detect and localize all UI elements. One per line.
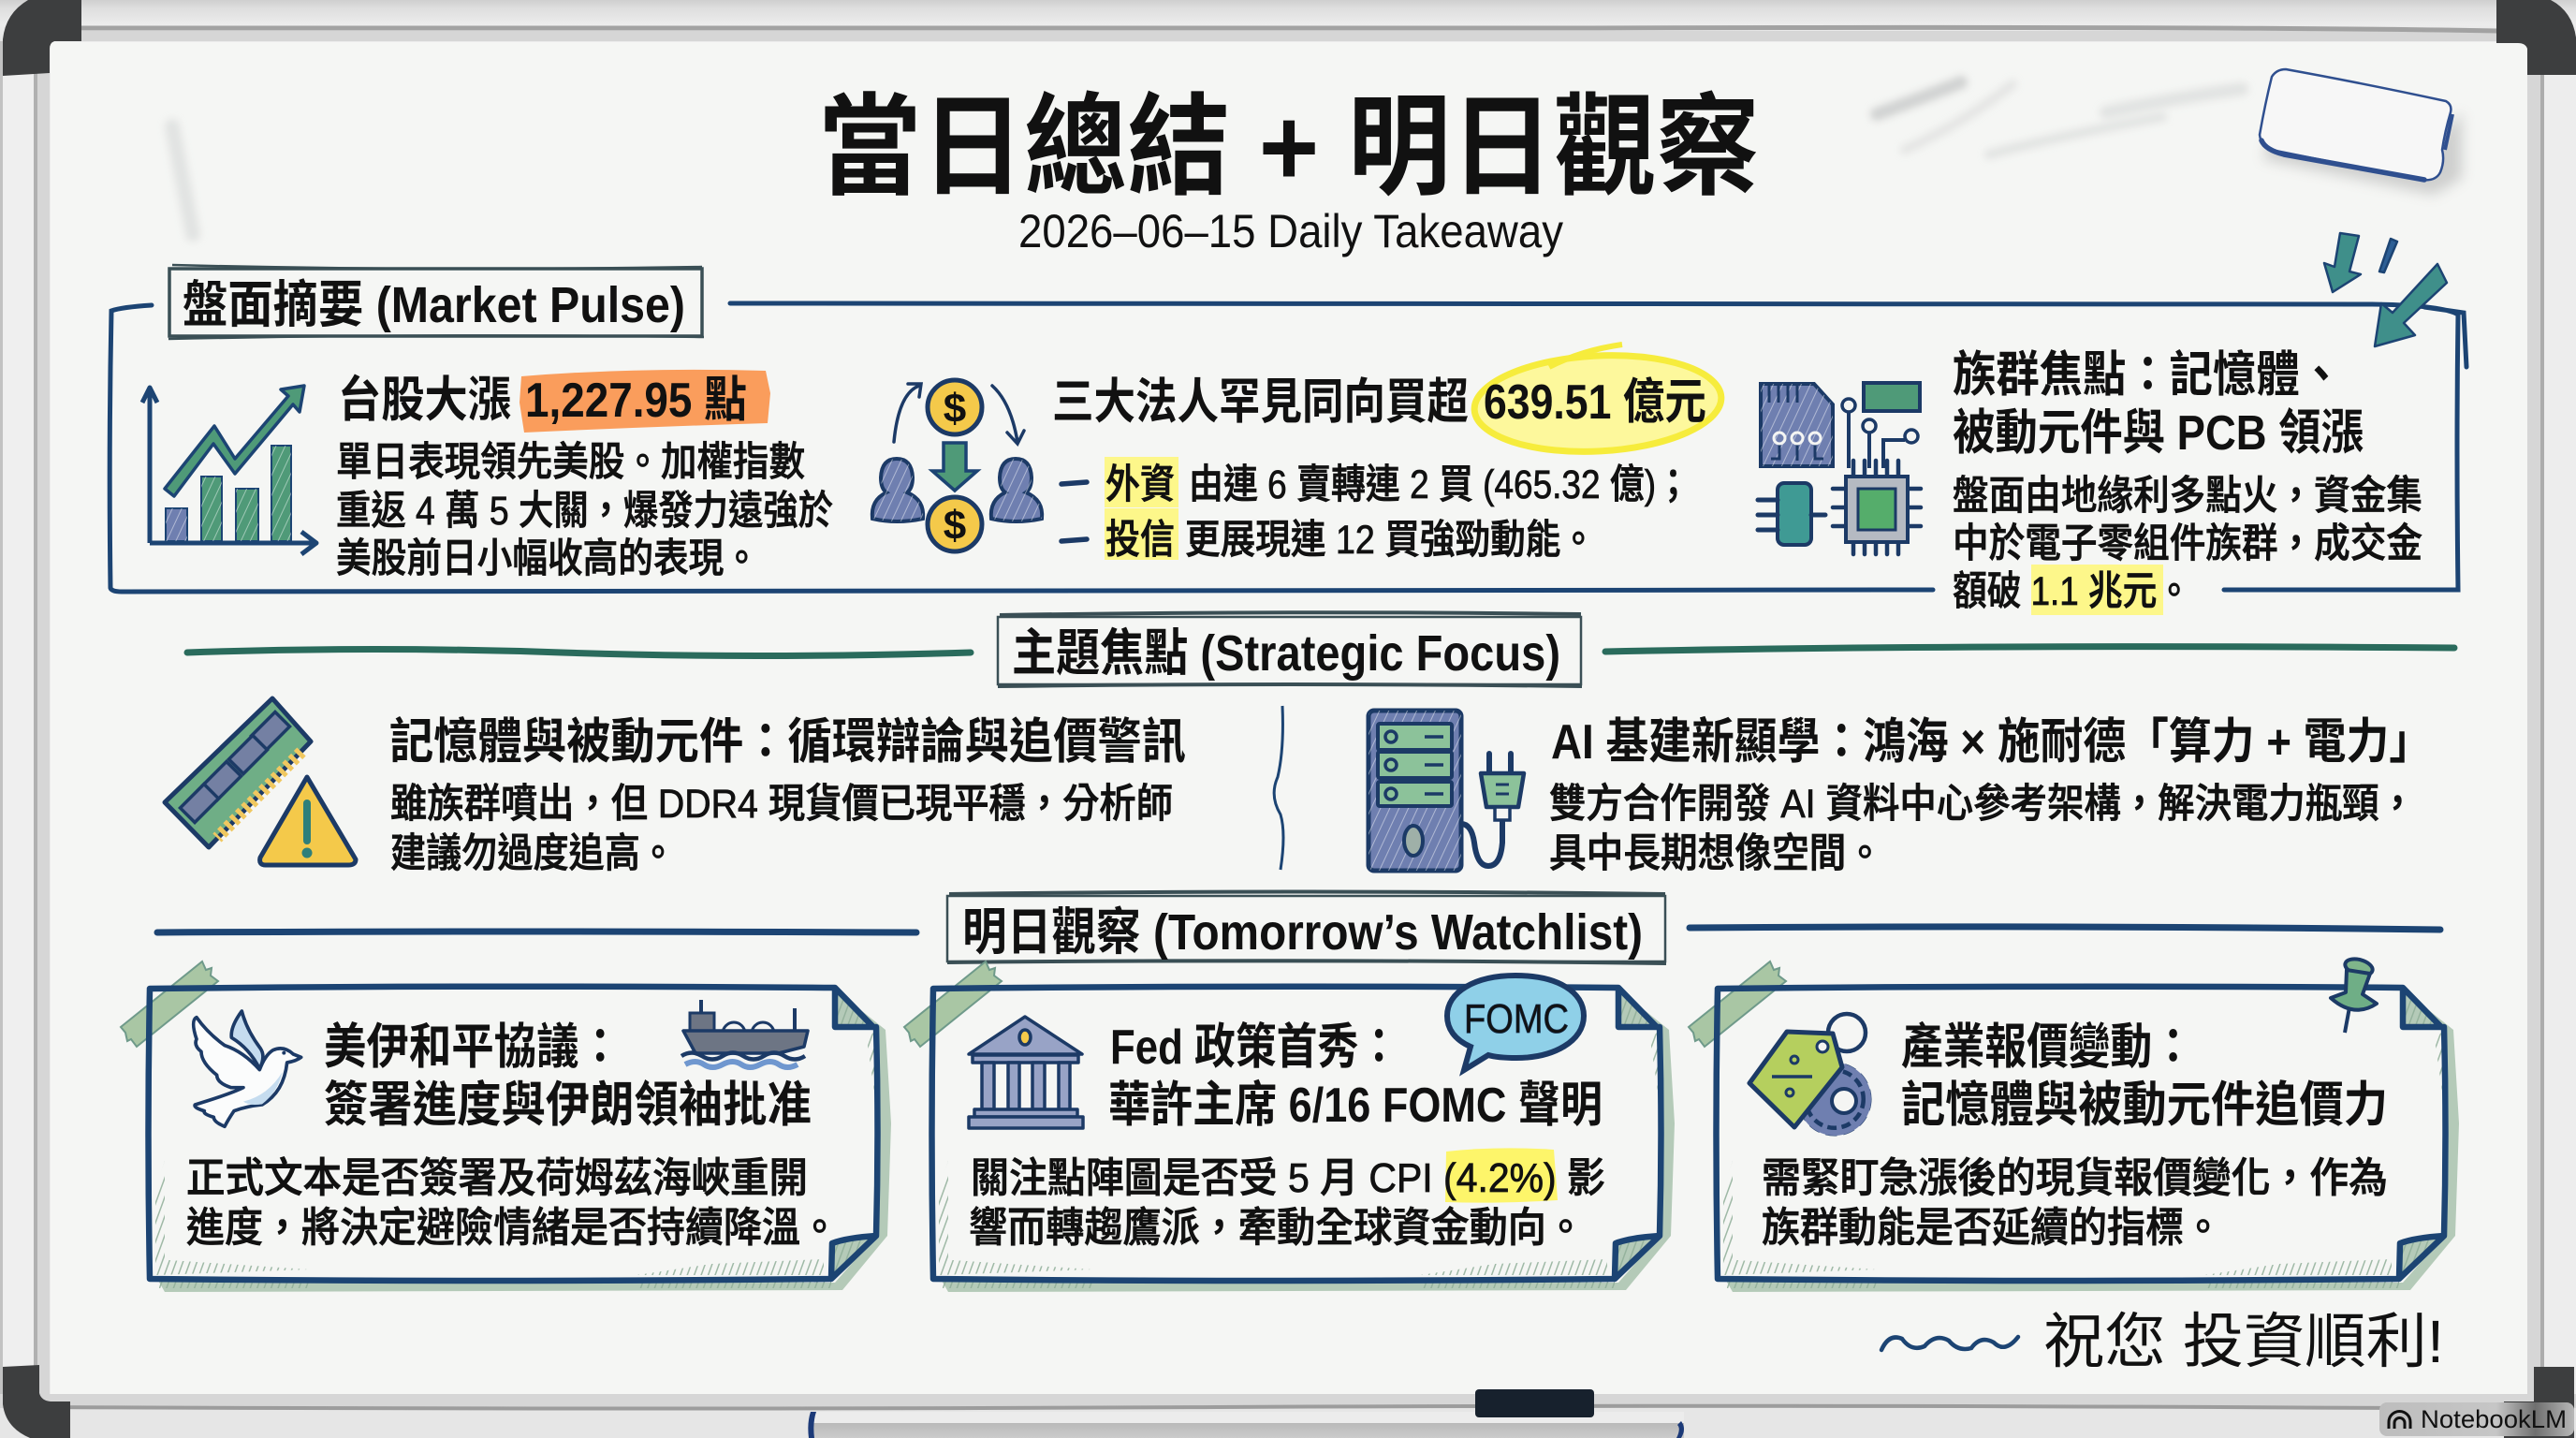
closing message: 祝您 投資順利!: [2043, 1308, 2444, 1375]
headline: institutional buying: 639.51 億元: [1484, 375, 1706, 430]
bullet list: foreign and trust: 更展現連 12 買強勁動能。: [1185, 518, 1596, 563]
headline: market rally: 台股大漲: [338, 374, 511, 428]
body text: [969, 1148, 1605, 1251]
text block: sector focus: 額破 1.1 兆元。: [1953, 569, 2191, 614]
title: 當日總結 + 明日觀察: [818, 86, 1760, 210]
icon: money flow: [872, 380, 1042, 551]
heading: 記憶體與被動元件追價力: [1901, 1078, 2388, 1133]
panel: US-Iran peace deal: [121, 961, 891, 1292]
divider: squiggle: [1274, 706, 1283, 870]
highlight: trust: [1105, 508, 1178, 560]
subtitle: 2026–06–15 Daily Takeaway: [1018, 205, 1563, 257]
board smudges: [172, 82, 2242, 234]
panel: Fed policy: [904, 961, 1675, 1292]
panel: industry quotes: [1689, 956, 2459, 1292]
marker on the tray: [808, 1412, 1684, 1438]
headline: market rally: 1,227.95 點: [525, 374, 747, 428]
highlight: CPI value: [1445, 1148, 1558, 1203]
closing message: [1881, 1308, 2444, 1375]
bullet list: foreign and trust: 外資: [1105, 462, 1175, 507]
callout: FOMC: FOMC: [1464, 996, 1569, 1042]
headline: institutional buying: [1052, 345, 1723, 458]
section heading: watchlist: 明日觀察 (Tomorrow’s Watchlist): [962, 904, 1643, 961]
icon: money flow: $: [944, 503, 966, 549]
section heading: strategic focus: [187, 612, 2454, 686]
icon: growth chart: [142, 386, 316, 554]
callout: FOMC: [1447, 976, 1584, 1070]
heading: 華許主席 6/16 FOMC 聲明: [1108, 1078, 1603, 1133]
heading: Fed 政策首秀：: [1110, 1020, 1399, 1075]
section heading: market pulse: [168, 265, 704, 339]
body text: 響而轉趨鷹派，牽動全球資金動向。: [969, 1205, 1585, 1251]
text block: memory cycle: 記憶體與被動元件：循環辯論與追價警訊: [389, 715, 1186, 770]
icon: push pin: [2331, 956, 2377, 1033]
bullet list: foreign and trust: 投信: [1105, 518, 1175, 563]
highlight: foreign investors: [1105, 457, 1178, 507]
heading: 產業報價變動：: [1901, 1020, 2194, 1075]
text block: market rally: 重返 4 萬 5 大關，爆發力遠強於: [336, 489, 833, 534]
card frame: [904, 961, 1675, 1292]
section heading: market pulse: 盤面摘要 (Market Pulse): [183, 277, 685, 333]
body text: 進度，將決定避險情緒是否持續降溫。: [186, 1205, 839, 1251]
watermark: NotebookLM: [2379, 1402, 2574, 1436]
icon: server and plug: [1368, 711, 1524, 871]
heading: [324, 1020, 812, 1133]
bullet list: foreign and trust: [1061, 457, 1690, 563]
heading: [1108, 1020, 1603, 1133]
card frame: [121, 961, 891, 1292]
section heading: strategic focus: 主題焦點 (Strategic Focus): [1012, 625, 1560, 682]
text block: sector focus: 族群焦點：記憶體、: [1953, 348, 2343, 403]
body text: [186, 1155, 839, 1251]
body text: 族群動能是否延續的指標。: [1762, 1205, 2222, 1251]
text block: market rally: 美股前日小幅收高的表現。: [336, 536, 759, 581]
icon: electronics: [1758, 383, 1921, 554]
icon: dove: [194, 1011, 301, 1126]
watermark: NotebookLM: NotebookLM: [2421, 1405, 2567, 1433]
heading: 美伊和平協議：: [324, 1020, 622, 1075]
card frame: [1689, 961, 2459, 1292]
text block: sector focus: 被動元件與 PCB 領漲: [1953, 406, 2364, 461]
highlight: 1.1 trillion: [2031, 565, 2163, 615]
eraser on the tray: [1475, 1389, 1594, 1417]
headline: market rally: [338, 370, 770, 433]
text block: memory cycle: [389, 715, 1186, 876]
body text: 正式文本是否簽署及荷姆茲海峽重開: [186, 1155, 808, 1201]
text block: sector focus: 盤面由地緣利多點火，資金集: [1953, 474, 2422, 519]
icon: cargo ship: [681, 1000, 808, 1067]
text block: sector focus: 中於電子零組件族群，成交金: [1953, 521, 2422, 566]
text block: market rally: 單日表現領先美股。加權指數: [336, 440, 805, 485]
icon: price tag and gear: [1749, 1014, 1868, 1133]
icon: central bank: [969, 1017, 1083, 1128]
heading: [1901, 1020, 2388, 1133]
text block: memory cycle: 雖族群噴出，但 DDR4 現貨價已現平穩，分析師: [390, 782, 1173, 827]
bullet list: foreign and trust: 由連 6 賣轉連 2 買 (465.32 億)；: [1189, 462, 1690, 507]
icon: corner arrows: [2324, 233, 2447, 346]
text block: AI infrastructure: 雙方合作開發 AI 資料中心參考架構，解決電力瓶頸，: [1549, 782, 2416, 827]
text block: memory cycle: 建議勿過度追高。: [390, 831, 676, 876]
body text: 關注點陣圖是否受 5 月 CPI (4.2%) 影: [971, 1155, 1605, 1201]
section heading: watchlist: [157, 891, 2440, 963]
heading: 簽署進度與伊朗領袖批准: [324, 1078, 812, 1133]
highlight: yellow circle: [1472, 345, 1723, 458]
text block: AI infrastructure: 具中長期想像空間。: [1549, 831, 1883, 876]
panel: market pulse: [110, 233, 2466, 615]
text block: AI infrastructure: [1549, 715, 2432, 876]
text block: market rally: [336, 440, 833, 581]
icon: money flow: $: [944, 386, 966, 432]
text block: AI infrastructure: AI 基建新顯學：鴻海 × 施耐德「算力 + 電力」: [1551, 715, 2432, 770]
highlight: orange: [520, 370, 770, 433]
headline: institutional buying: 三大法人罕見同向買超: [1052, 375, 1469, 430]
body text: 需緊盯急漲後的現貨報價變化，作為: [1762, 1155, 2388, 1201]
panel outline: [110, 303, 2466, 592]
body text: [1762, 1155, 2388, 1251]
text block: sector focus: [1953, 348, 2422, 615]
icon: memory with warning: [165, 698, 356, 865]
eraser: top right: [2260, 69, 2462, 195]
